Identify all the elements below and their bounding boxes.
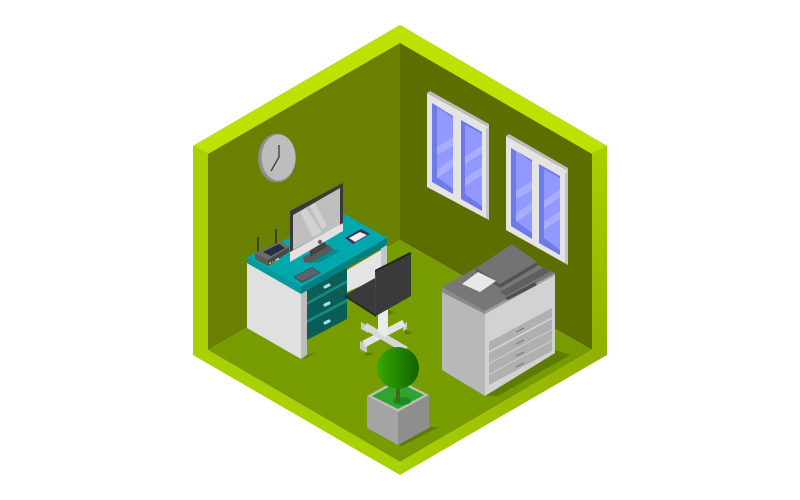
room shell xyxy=(193,25,607,475)
monitor shadow on desk xyxy=(310,249,340,263)
copier top xyxy=(442,252,555,311)
desk top xyxy=(247,213,387,287)
control panel xyxy=(505,282,537,300)
copier lid xyxy=(476,244,537,284)
right wall xyxy=(400,25,607,355)
tree crown xyxy=(377,347,419,389)
office chair xyxy=(345,252,413,356)
logo xyxy=(318,240,322,244)
chair base xyxy=(360,310,413,356)
rim: bottom right xyxy=(400,350,607,475)
chair seat xyxy=(345,278,376,315)
planter shadow xyxy=(398,427,439,446)
tablet xyxy=(293,267,321,283)
floor xyxy=(208,240,592,462)
window left xyxy=(427,91,489,220)
drawer 3 xyxy=(489,330,552,374)
drawer 1 xyxy=(489,308,552,351)
monitor frame xyxy=(290,183,343,262)
rim: bottom left xyxy=(193,350,400,475)
monitor stand xyxy=(303,245,333,263)
monitor xyxy=(290,183,343,263)
smartphone xyxy=(345,229,370,244)
copier left face xyxy=(442,292,485,396)
desk floor shadow xyxy=(301,352,316,359)
monitor screen xyxy=(293,188,340,250)
drawer 4 xyxy=(489,341,552,385)
router xyxy=(255,229,289,266)
left wall xyxy=(193,25,400,355)
wall clock xyxy=(258,134,296,182)
desk right leg xyxy=(347,250,381,292)
rim: left side xyxy=(193,146,208,355)
drawers xyxy=(307,268,347,340)
monitor chin xyxy=(290,223,343,262)
chair back xyxy=(375,252,411,316)
copier right face xyxy=(485,275,555,396)
window right xyxy=(506,134,568,265)
desk left panel xyxy=(247,263,301,359)
potted plant xyxy=(367,347,439,446)
trunk xyxy=(393,397,411,405)
drawer 2 xyxy=(489,319,552,363)
chair pole xyxy=(378,310,388,337)
planter xyxy=(367,379,429,412)
rim: top edges xyxy=(193,25,607,154)
copier xyxy=(442,244,570,396)
rim: right side xyxy=(592,146,607,355)
paper xyxy=(462,272,496,292)
desk xyxy=(247,213,387,359)
copier shadow xyxy=(485,350,570,396)
